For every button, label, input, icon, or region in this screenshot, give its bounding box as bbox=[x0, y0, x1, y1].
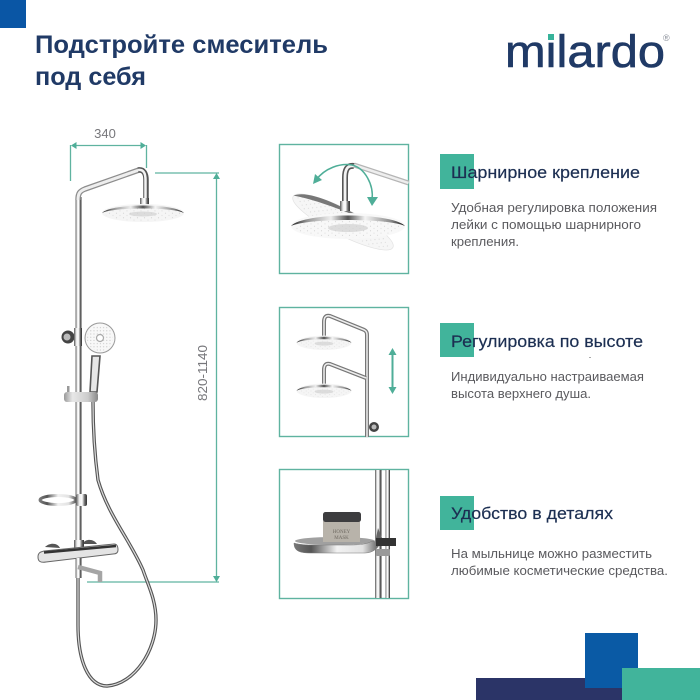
text: swivel mount: крепления. bbox=[451, 234, 519, 249]
text: swivel mount: Удобная регулировка положения bbox=[451, 200, 657, 215]
heading: swivel mount: Шарнирное крепление bbox=[451, 163, 640, 182]
heading: height adjustment bbox=[440, 323, 643, 358]
corner square: top left bbox=[0, 0, 26, 28]
text: swivel mount: лейки с помощью шарнирного bbox=[451, 217, 641, 232]
arrow: rotation bbox=[316, 165, 372, 200]
heading: details: Удобство в деталях bbox=[451, 504, 614, 523]
title bbox=[35, 31, 328, 91]
overhead arm bbox=[78, 170, 139, 200]
icon: wall mount bbox=[369, 422, 379, 432]
logo: milardo: ® bbox=[663, 33, 670, 43]
slider bbox=[67, 386, 70, 396]
icon: dish back bbox=[295, 537, 375, 545]
icon: main head bbox=[291, 213, 405, 239]
thermostat bbox=[45, 540, 97, 548]
dimension: height 820-1140 bbox=[87, 173, 220, 582]
text: details bbox=[451, 546, 668, 578]
icon: jar: MASK bbox=[334, 536, 349, 541]
text: details: На мыльнице можно разместить bbox=[451, 546, 652, 561]
heading: swivel mount bbox=[440, 154, 640, 189]
icon: arm bbox=[354, 165, 408, 183]
icon: jar bbox=[323, 512, 361, 542]
icon: dish front and bracket bbox=[294, 541, 380, 553]
logo: milardo: milardo bbox=[505, 26, 665, 77]
text: height adjustment bbox=[451, 369, 644, 401]
icon: jar: HONEY bbox=[333, 530, 351, 535]
spout bbox=[76, 558, 82, 578]
dimension: height 820-1140: 820-1140 bbox=[195, 345, 210, 401]
shower system illustration bbox=[38, 170, 184, 686]
icon: lower arm bbox=[324, 364, 366, 384]
icon: rails bbox=[375, 470, 382, 598]
title: Подстройте смеситель bbox=[35, 31, 328, 59]
icon: upper head bbox=[297, 336, 351, 350]
wall mount bbox=[62, 330, 74, 344]
overhead shower head bbox=[102, 204, 184, 222]
icon: gooseneck bbox=[345, 166, 354, 205]
corner blocks: bottom right bbox=[476, 633, 700, 700]
panel: details bbox=[280, 470, 408, 598]
title: под себя bbox=[35, 63, 146, 91]
text: details: любимые косметические средства. bbox=[451, 563, 668, 578]
icon: tilted head bbox=[287, 185, 399, 259]
main vertical pipe bbox=[76, 197, 82, 577]
icon: lower head bbox=[297, 384, 351, 398]
panel: swivel mount bbox=[280, 144, 408, 274]
hose bbox=[78, 402, 156, 686]
text: swivel mount bbox=[451, 200, 657, 249]
heading: height adjustment: Регулировка по высоте bbox=[451, 332, 643, 351]
text: height adjustment: Индивидуально настраиваемая bbox=[451, 369, 644, 384]
arrow: up and down bbox=[392, 352, 394, 390]
soap dish bbox=[40, 496, 76, 504]
panel: height adjustment bbox=[280, 308, 408, 437]
icon: pipe with upper arm bbox=[324, 316, 367, 437]
dimension: width 340: 340 bbox=[94, 126, 116, 141]
heading: details bbox=[440, 496, 614, 530]
hand shower bbox=[90, 356, 100, 392]
dimension: width 340 bbox=[70, 126, 146, 181]
text: height adjustment: высота верхнего душа. bbox=[451, 386, 591, 401]
